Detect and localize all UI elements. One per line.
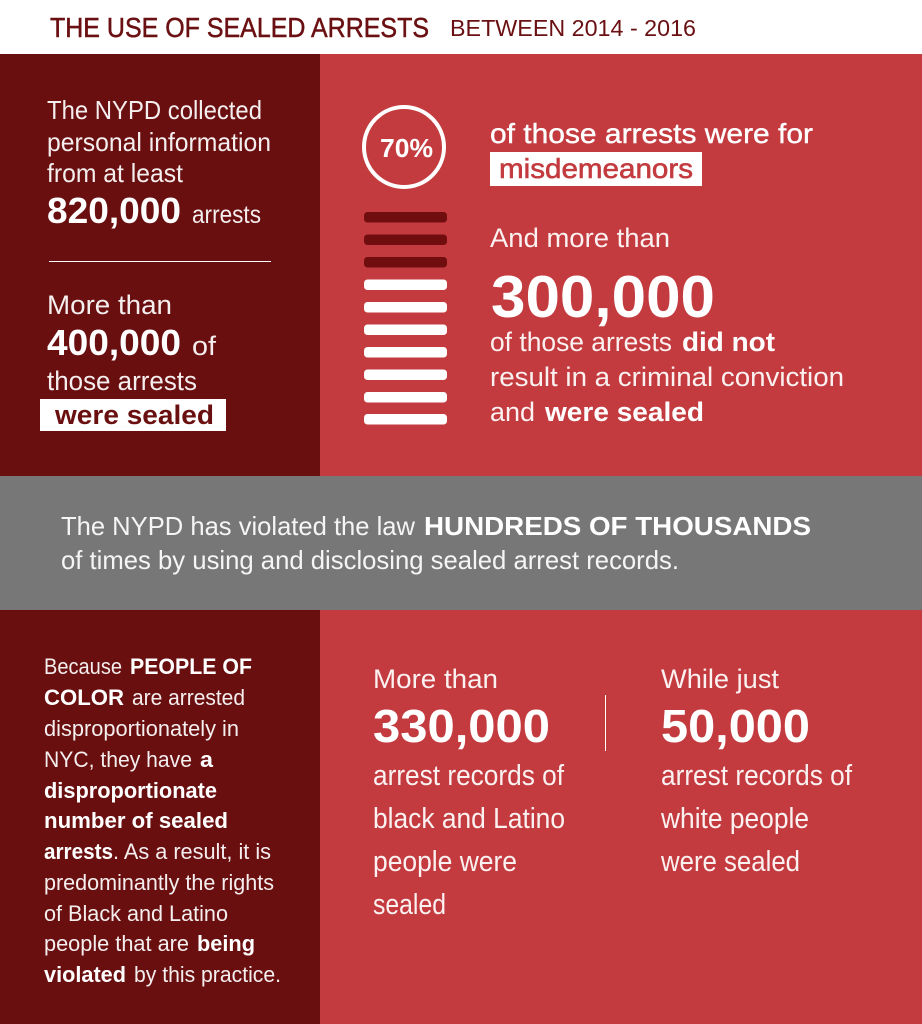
panel: arrests collected: The NYPD collected [47,95,262,125]
text: no conviction and sealed: result in a criminal conviction [490,362,844,392]
stat: black and Latino records: arrest records of [373,760,565,792]
stat: black and Latino records: 330,000 [373,700,550,752]
icon: 70% circle [364,107,444,187]
text: no conviction and sealed [490,327,844,427]
stat: white records: 50,000 [661,700,810,752]
text: no conviction and sealed: of those arrests [490,327,672,357]
text: no conviction and sealed: and [490,397,535,427]
title [50,12,696,43]
panel: people of color: by this practice. [134,962,281,987]
panel: people of color: predominantly the rights [44,870,274,895]
text: no conviction and sealed: did not [682,327,775,357]
text: no conviction and sealed: were sealed [544,397,704,427]
panel: people of color: . As a result, it is [113,839,271,864]
text: and more than: And more than [490,223,670,253]
panel: violated the law band: of times by using and disclosing sealed arrest records. [61,545,679,575]
stat: white records [660,664,853,878]
panel: people of color [0,610,320,1024]
panel: violated the law band: The NYPD has violated the law [61,511,415,541]
panel: arrests collected: of [192,331,217,361]
stat: white records: While just [661,664,780,694]
panel: people of color: being [197,931,255,956]
panel: people of color: number of sealed [44,808,228,833]
panel: arrests collected: More than [47,290,172,320]
stat: black and Latino records [373,664,565,921]
panel: people of color: arrests [44,839,113,864]
stat: white records: were sealed [660,846,800,878]
stat: black and Latino records: black and Latino [373,803,565,835]
stat: white records: white people [660,803,809,835]
panel: sealed records comparison [320,610,922,1024]
panel: violated the law band [0,476,922,610]
panel: arrests collected: personal information [47,127,271,157]
stat: black and Latino records: people were [373,846,517,878]
number: 300,000: 300,000 [491,264,715,330]
panel: people of color: a [200,747,214,772]
panel: violated the law band: HUNDREDS OF THOUSANDS [424,511,811,541]
panel: misdemeanors and convictions [320,54,922,476]
panel: people of color: of Black and Latino [44,901,228,926]
title: THE USE OF SEALED ARRESTS [50,12,429,43]
stat: black and Latino records: sealed [373,889,446,921]
callout: misdemeanors: misdemeanors [499,153,693,184]
text: of those arrests were for: of those arrests were for [490,118,813,149]
panel: arrests collected: arrests [192,201,261,229]
panel: arrests collected [0,54,320,476]
panel: people of color: Because [44,654,122,679]
panel: people of color: are arrested [132,685,245,710]
panel: people of color: PEOPLE OF [130,654,252,679]
stat: black and Latino records: More than [373,664,498,694]
panel: arrests collected: 400,000 [47,322,181,363]
panel: people of color: disproportionate [44,778,217,803]
panel: arrests collected: from at least [47,158,184,188]
panel: people of color: COLOR [44,685,124,710]
panel: arrests collected: 820,000 [47,190,181,231]
panel: arrests collected: those arrests [47,366,197,396]
title: BETWEEN 2014 - 2016 [450,15,696,41]
bar chart: 3 of 10 bars dark [364,212,447,424]
callout: were sealed: were sealed [54,400,214,430]
panel: people of color: violated [44,962,126,987]
panel: people of color: people that are [44,931,189,956]
stat: white records: arrest records of [661,760,853,792]
icon: 70% circle: 70% [380,133,433,163]
panel: people of color: disproportionately in [44,716,239,741]
panel: people of color: NYC, they have [44,747,192,772]
